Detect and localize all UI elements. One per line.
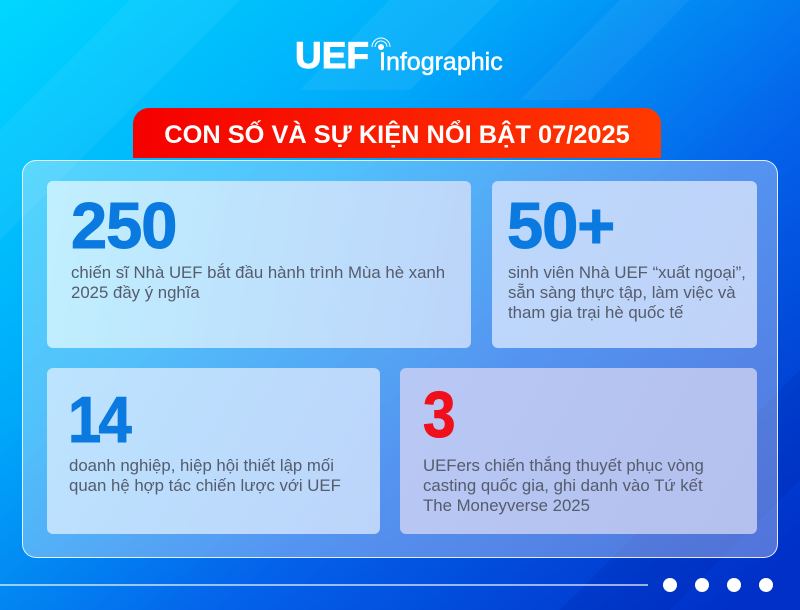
- description: [71, 263, 445, 302]
- logo: [295, 35, 503, 76]
- description: UEFers chiến thắng thuyết phục vòng: [423, 456, 704, 475]
- description: doanh nghiệp, hiệp hội thiết lập mối: [69, 456, 334, 475]
- description: sẵn sàng thực tập, làm việc và: [508, 283, 736, 302]
- description: casting quốc gia, ghi danh vào Tứ kết: [423, 476, 703, 495]
- number 250: 250: [71, 189, 176, 262]
- description: chiến sĩ Nhà UEF bắt đầu hành trình Mùa hè xanh: [71, 263, 445, 282]
- card: 14: [47, 368, 380, 534]
- pagination dots: [663, 578, 773, 592]
- card: 50+: [492, 181, 757, 348]
- description: [423, 456, 704, 515]
- number 3: 3: [423, 378, 456, 451]
- number 14: 14: [68, 383, 129, 456]
- card: 3: [400, 368, 757, 534]
- icon: signal: [372, 38, 390, 50]
- title text: CON SỐ VÀ SỰ KIỆN NỔI BẬT 07/2025: [164, 121, 630, 149]
- number 50+: 50+: [507, 189, 614, 262]
- description: The Moneyverse 2025: [423, 496, 590, 515]
- description: 2025 đầy ý nghĩa: [71, 283, 200, 302]
- logo wordmark UEF: UEF: [295, 35, 369, 76]
- description: sinh viên Nhà UEF “xuất ngoại”,: [508, 263, 746, 282]
- description: [508, 263, 746, 322]
- title banner: [133, 108, 661, 158]
- logo wordmark Infographic: Infographic: [379, 48, 503, 76]
- main glass panel: [22, 160, 778, 558]
- card: 250: [47, 181, 471, 348]
- description: [69, 456, 341, 495]
- description: tham gia trại hè quốc tế: [508, 303, 683, 322]
- footer line: [0, 584, 648, 586]
- description: quan hệ hợp tác chiến lược với UEF: [69, 476, 341, 495]
